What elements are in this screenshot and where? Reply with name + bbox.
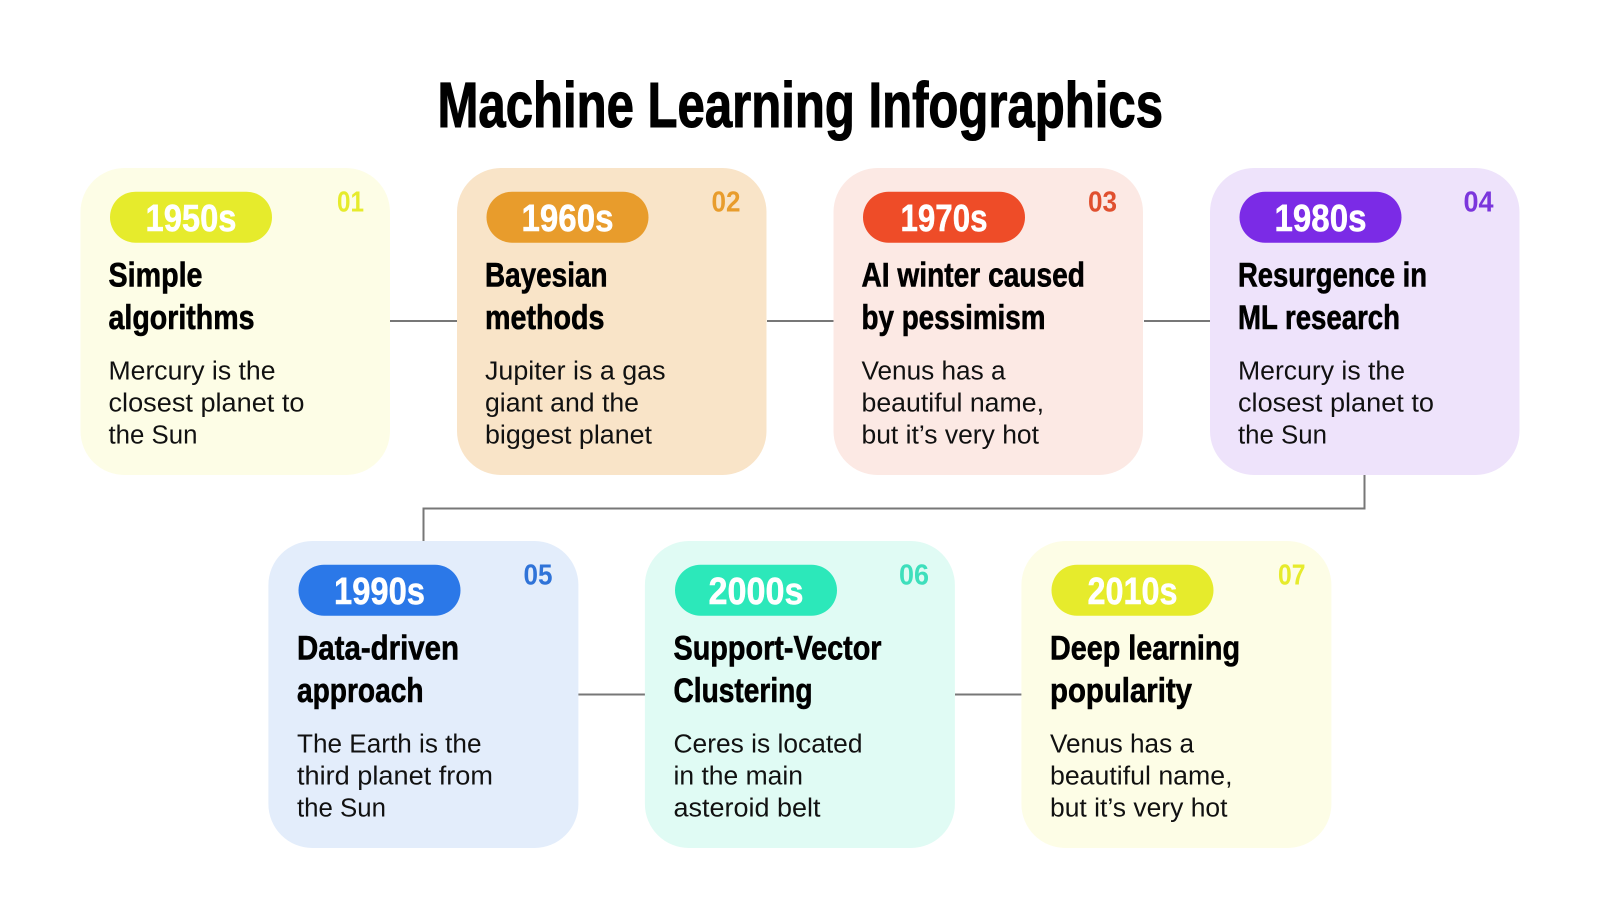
panel: 1970s: [834, 168, 1143, 475]
panel: 1970s: AI winter caused: [862, 257, 1085, 295]
title: Machine Learning Infographics: [438, 69, 1163, 141]
panel: 1950s: algorithms: [108, 299, 254, 337]
panel: 1950s: closest planet to: [108, 389, 304, 417]
panel: 1950s: 1950s: [146, 198, 236, 240]
arrow: connector 01 to 02: [390, 320, 457, 322]
panel: 2010s: beautiful name,: [1050, 762, 1232, 790]
panel: 1960s: methods: [485, 299, 604, 337]
panel: 1980s: closest planet to: [1238, 389, 1434, 417]
panel: 1990s: the Sun: [297, 794, 386, 822]
panel: 2000s: [645, 541, 955, 848]
arrow: connector 04 to 05: [424, 475, 1364, 542]
panel: 1970s: beautiful name,: [862, 389, 1044, 417]
arrow: connector 02 to 03: [767, 320, 834, 322]
panel: 2000s: 06: [899, 560, 929, 592]
panel: 1970s: 1970s: [900, 198, 988, 240]
panel: 2010s: 2010s: [1088, 571, 1178, 613]
panel: 1970s: but it’s very hot: [862, 421, 1039, 449]
panel: 2000s: Support-Vector: [674, 630, 882, 668]
panel: 1960s: [457, 168, 766, 475]
panel: 1960s: biggest planet: [485, 421, 652, 449]
panel: 2010s: Venus has a: [1050, 730, 1195, 758]
panel: 1960s: Jupiter is a gas: [485, 357, 666, 385]
panel: 1970s: 03: [1088, 187, 1117, 219]
panel: 1990s: 05: [524, 560, 552, 592]
panel: 2010s: 07: [1278, 560, 1306, 592]
panel: 1990s: third planet from: [297, 762, 493, 790]
panel: 1970s: Venus has a: [862, 357, 1006, 385]
panel: 1990s: approach: [297, 672, 424, 710]
panel: 2010s: Deep learning: [1050, 630, 1240, 668]
panel: 2010s: popularity: [1050, 672, 1192, 710]
panel: 1980s: Mercury is the: [1238, 357, 1405, 385]
panel: 1980s: [1210, 168, 1520, 475]
panel: 1950s: the Sun: [108, 421, 198, 449]
panel: 1960s: 1960s: [522, 198, 614, 240]
panel: 2000s: Clustering: [674, 672, 812, 710]
panel: 2010s: [1021, 541, 1331, 848]
panel: 1990s: The Earth is the: [297, 730, 482, 758]
panel: 2000s: Ceres is located: [674, 730, 862, 758]
arrow: connector 03 to 04: [1144, 320, 1210, 322]
panel: 1960s: Bayesian: [485, 257, 608, 295]
panel: 1980s: 04: [1464, 187, 1494, 219]
panel: 1990s: 1990s: [334, 571, 425, 613]
panel: 1980s: the Sun: [1238, 421, 1327, 449]
panel: 1950s: Simple: [108, 257, 202, 295]
panel: 2000s: in the main: [674, 762, 803, 790]
arrow: connector 06 to 07: [955, 694, 1022, 696]
panel: 2000s: 2000s: [708, 571, 804, 613]
arrow: connector 05 to 06: [578, 694, 645, 696]
panel: 1960s: 02: [712, 187, 740, 219]
panel: 1980s: ML research: [1238, 299, 1400, 337]
panel: 2010s: but it’s very hot: [1050, 794, 1228, 822]
panel: 1980s: 1980s: [1274, 198, 1366, 240]
panel: 1950s: Mercury is the: [108, 357, 276, 385]
panel: 1980s: Resurgence in: [1238, 257, 1427, 295]
panel: 1990s: Data-driven: [297, 630, 459, 668]
panel: 2000s: asteroid belt: [674, 794, 820, 822]
panel: 1970s: by pessimism: [862, 299, 1046, 337]
panel: 1990s: [268, 541, 578, 848]
panel: 1950s: 01: [337, 187, 364, 219]
panel: 1950s: [80, 168, 390, 475]
panel: 1960s: giant and the: [485, 389, 639, 417]
